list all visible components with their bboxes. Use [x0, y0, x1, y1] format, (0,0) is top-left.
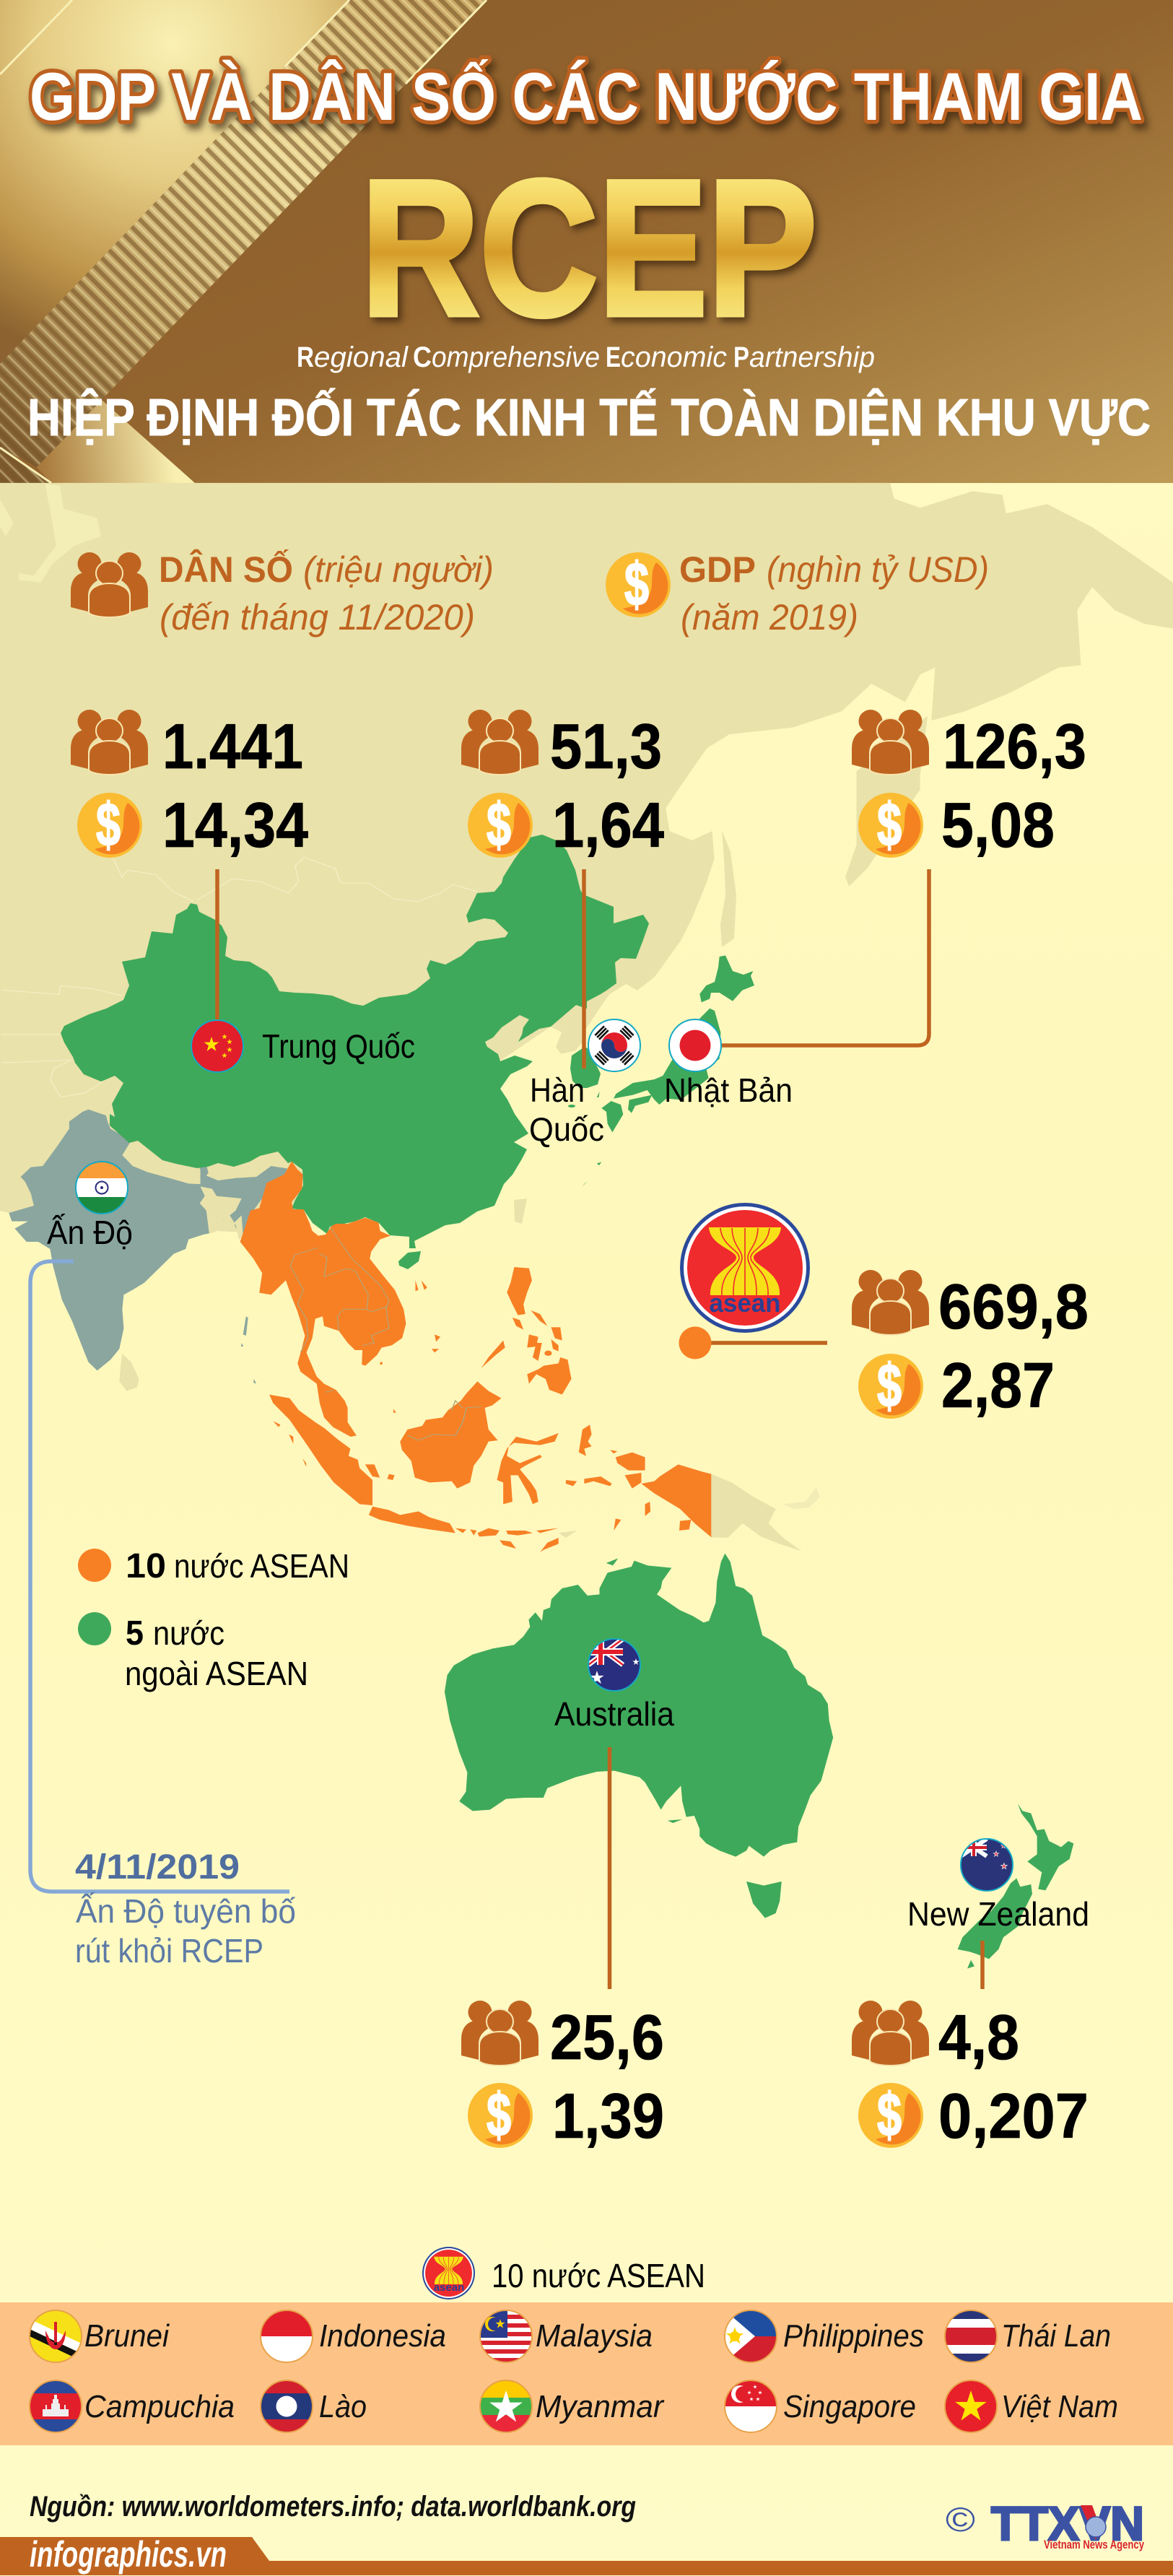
flag: Philippines	[725, 2310, 777, 2362]
stats: Japan: 5,08	[941, 789, 1055, 861]
map: ASEAN countries	[240, 1161, 820, 1552]
stats: South Korea	[461, 710, 664, 861]
flag: Indonesia	[261, 2310, 313, 2362]
country names: Philippines	[783, 2318, 924, 2354]
subtitle: Regional Comprehensive Economic Partnership: P	[733, 341, 749, 373]
source note: Nguồn: www.worldometers.info; data.worldbank.org	[30, 2491, 636, 2523]
legend: country groups: 5	[126, 1614, 144, 1653]
legend: GDP: (nghìn tỷ USD)	[767, 549, 989, 590]
stats: New Zealand	[852, 2001, 1089, 2151]
flag: Singapore	[725, 2380, 777, 2432]
panel: ASEAN flags	[0, 2302, 1173, 2445]
stats: Japan: 126,3	[943, 710, 1086, 782]
flag: Vietnam	[945, 2380, 997, 2432]
Nepal, Bhutan, Bangladesh, Sri Lanka	[119, 1141, 289, 1391]
map: South Korea	[568, 1048, 601, 1108]
subtitle: Regional Comprehensive Economic Partnership: omprehensive	[432, 341, 600, 373]
stats: China: $	[96, 791, 121, 858]
legend: country groups: 10	[126, 1547, 166, 1585]
map: Japan	[583, 955, 754, 1186]
subtitle: Regional Comprehensive Economic Partnership: conomic	[621, 341, 727, 373]
subtitle: Regional Comprehensive Economic Partnership: egional	[314, 341, 409, 373]
stats: China: 14,34	[162, 789, 308, 861]
stats: Japan	[852, 710, 1086, 861]
legend: country groups: nước	[153, 1614, 224, 1652]
stats: ASEAN: 2,87	[941, 1349, 1055, 1421]
icon: ASEAN emblem	[679, 1203, 810, 1359]
icon: ASEAN emblem: asean	[709, 1288, 781, 1318]
footer: infographics.vn: infographics.vn	[30, 2534, 227, 2575]
subtitle: Regional Comprehensive Economic Partnership	[297, 341, 875, 373]
legend: population	[71, 549, 494, 638]
map: Australia	[445, 1554, 833, 1918]
map: China	[61, 835, 649, 1269]
Tasmania	[746, 1881, 782, 1918]
flag: Brunei	[30, 2310, 82, 2362]
label: Hàn Quốc: Hàn	[530, 1071, 585, 1109]
flag: Myanmar	[480, 2380, 532, 2432]
map: background land	[0, 483, 1173, 1235]
logo: TTXVN: Vietnam News Agency	[1044, 2538, 1144, 2551]
legend: country groups: nước ASEAN	[174, 1547, 349, 1585]
flag: India	[76, 1162, 128, 1214]
flag: Thailand	[945, 2310, 997, 2362]
country names: Thái Lan	[1001, 2318, 1111, 2354]
Hainan	[398, 1251, 421, 1269]
flag: China	[191, 1020, 243, 1072]
flag: Australia	[588, 1639, 640, 1691]
country names: Brunei	[84, 2318, 170, 2354]
map: New Zealand	[958, 1803, 1073, 1969]
Papua New Guinea and Timor	[559, 1474, 801, 1551]
stats: New Zealand: $	[877, 2081, 902, 2149]
country names: Singapore	[783, 2389, 916, 2424]
label: Trung Quốc: Trung Quốc	[262, 1027, 415, 1065]
label: Nhật Bản: Nhật Bản	[664, 1071, 793, 1109]
flag: New Zealand	[961, 1839, 1013, 1891]
callout: India withdrawal: Ấn Độ tuyên bố	[76, 1892, 296, 1930]
legend: country groups	[78, 1547, 349, 1692]
stats: New Zealand: 0,207	[938, 2080, 1089, 2151]
flag: South Korea	[588, 1019, 640, 1071]
stats: ASEAN: 669,8	[938, 1271, 1089, 1342]
stats: South Korea: 51,3	[550, 710, 662, 782]
faint borders	[1, 857, 477, 1097]
callout: India withdrawal	[30, 1261, 296, 1970]
stats: Australia: $	[487, 2081, 511, 2149]
country names: Myanmar	[536, 2389, 665, 2424]
country names: Việt Nam	[1001, 2389, 1118, 2424]
heading: 10 ASEAN countries	[422, 2247, 705, 2299]
logo: TTXVN: TTXVN	[991, 2497, 1144, 2550]
stats: Australia	[461, 2001, 664, 2151]
label: Ấn Độ: Ấn Độ	[47, 1214, 133, 1251]
stats: ASEAN: $	[877, 1352, 902, 1419]
panel: header	[0, 0, 1173, 483]
stats: South Korea: $	[487, 791, 511, 858]
subtitle: Regional Comprehensive Economic Partnership: C	[413, 341, 432, 373]
legend: GDP: (năm 2019)	[681, 597, 858, 638]
flag: Japan	[669, 1019, 721, 1071]
stats: Japan: $	[877, 791, 902, 858]
callout: India withdrawal: rút khỏi RCEP	[75, 1932, 263, 1970]
label: Australia: Australia	[554, 1695, 674, 1733]
subtitle: Regional Comprehensive Economic Partnership: artnership	[749, 341, 875, 373]
callout: India withdrawal: 4/11/2019	[75, 1848, 240, 1887]
footer: infographics.vn	[0, 2534, 1173, 2575]
label: Hàn Quốc	[529, 1071, 604, 1148]
legend: population: (triệu người)	[303, 549, 494, 590]
heading: 10 ASEAN countries: 10 nước ASEAN	[492, 2257, 705, 2294]
country names: Indonesia	[319, 2318, 446, 2354]
flag: Cambodia	[30, 2380, 82, 2432]
flag: Laos	[261, 2380, 313, 2432]
country names: Lào	[319, 2389, 367, 2424]
connector lines	[217, 869, 982, 1989]
stats: New Zealand: 4,8	[938, 2001, 1019, 2073]
legend: population: (đến tháng 11/2020)	[160, 597, 475, 638]
legend: population: DÂN SỐ	[159, 549, 293, 590]
legend: GDP	[606, 549, 989, 638]
label: Hàn Quốc: Quốc	[529, 1110, 604, 1148]
country names	[84, 2318, 1118, 2424]
label: New Zealand: New Zealand	[907, 1895, 1089, 1933]
country names: Malaysia	[536, 2318, 653, 2354]
logo: TTXVN: ©	[946, 2500, 975, 2538]
title: RCEP: RCEP	[361, 139, 817, 356]
stats: China	[71, 710, 308, 861]
legend: GDP: GDP	[679, 549, 756, 590]
map: India	[9, 1110, 289, 1391]
stats: China: 1.441	[162, 710, 303, 782]
country names: Campuchia	[84, 2389, 235, 2424]
stats: ASEAN	[852, 1270, 1089, 1421]
subtitle: Regional Comprehensive Economic Partnership: R	[297, 341, 314, 373]
stats: South Korea: 1,64	[552, 789, 664, 861]
heading: 10 ASEAN countries: asean	[434, 2281, 464, 2294]
legend: country groups: ngoài ASEAN	[125, 1655, 308, 1692]
stats: Australia: 25,6	[550, 2001, 664, 2073]
legend: GDP: $	[624, 550, 649, 618]
flag: Malaysia	[480, 2310, 532, 2362]
stats: Australia: 1,39	[552, 2080, 664, 2151]
subtitle: Regional Comprehensive Economic Partnership: E	[606, 341, 621, 373]
